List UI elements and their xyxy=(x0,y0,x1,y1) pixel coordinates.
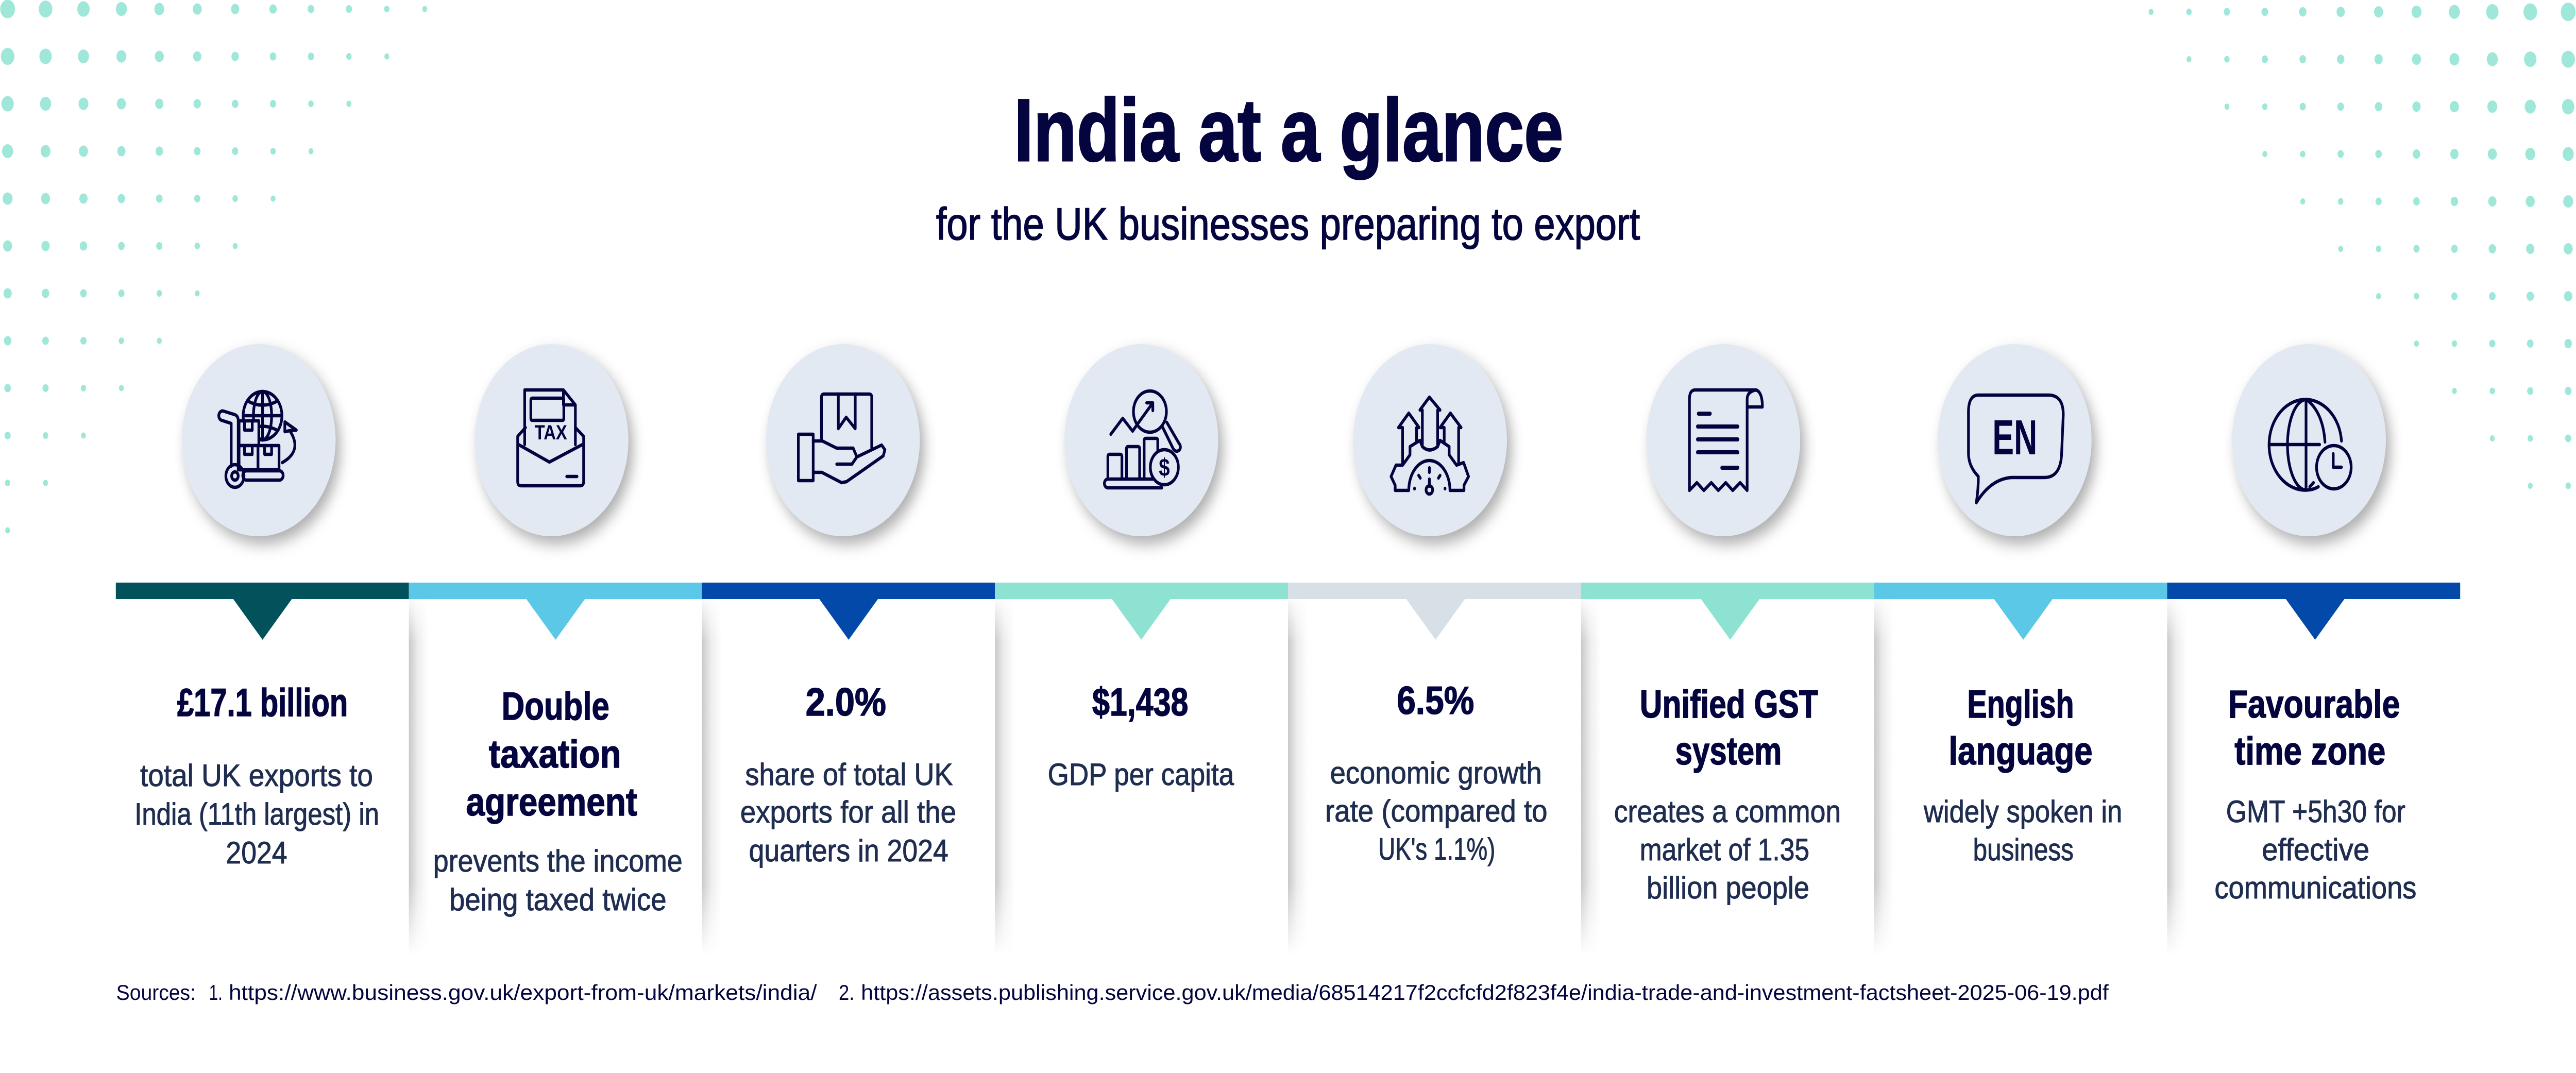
description: exports for all the xyxy=(740,795,956,829)
panel: economic growth xyxy=(1288,344,1581,866)
description: business xyxy=(1973,832,2074,867)
pointer xyxy=(527,599,585,640)
heading: Unified GST xyxy=(1640,683,1818,726)
pointer xyxy=(2286,599,2344,640)
heading: system xyxy=(1675,729,1782,773)
heading: time zone xyxy=(2234,729,2385,773)
description: effective xyxy=(2262,832,2369,867)
colour bar segment xyxy=(2167,583,2460,599)
panel: GDP per capita xyxy=(995,344,1288,792)
panel: unified GST xyxy=(1581,344,1874,905)
stat heading: $1,438 xyxy=(1092,680,1188,724)
description: economic growth xyxy=(1330,756,1542,790)
icon badge: tax envelope xyxy=(474,344,629,536)
pointer xyxy=(1994,599,2053,640)
icon badge: receipt xyxy=(1647,344,1800,536)
icon badge: hand holding box xyxy=(766,344,920,536)
description xyxy=(1923,794,2122,867)
pointer xyxy=(819,599,878,640)
description: GDP per capita xyxy=(1048,757,1234,792)
description: total UK exports to xyxy=(140,758,373,793)
sources line: https://assets.publishing.service.gov.uk/media/68514217f2ccfcfd2f823f4e/india-trade-and-investment-factsheet-2025-06-19.pdf xyxy=(861,981,2109,1005)
title: India at a glance xyxy=(1014,81,1563,180)
panel: time zone xyxy=(2167,344,2460,905)
dot pattern: top left xyxy=(0,0,427,534)
icon badge: EN speech bubble xyxy=(1938,344,2092,536)
icon badge: gear with growth arrows xyxy=(1353,344,1507,536)
icon badge: globe with clock xyxy=(2232,344,2386,536)
description: share of total UK xyxy=(745,757,953,792)
colour bar segment xyxy=(995,583,1288,599)
stat heading: 2.0% xyxy=(806,680,886,724)
description xyxy=(1325,756,1548,866)
stat heading: £17.1 billion xyxy=(177,681,348,725)
icon badge: chart, magnifier and coin: $ xyxy=(1159,454,1170,482)
sources line: 2. xyxy=(839,981,854,1005)
icon badge: chart, magnifier and coin xyxy=(1064,344,1218,536)
pointer xyxy=(1701,599,1759,640)
heading: language xyxy=(1948,729,2093,773)
subtitle: for the UK businesses preparing to export xyxy=(936,198,1640,249)
icon badge: EN speech bubble: EN xyxy=(1992,410,2037,465)
description: 2024 xyxy=(226,836,287,870)
description: billion people xyxy=(1647,871,1809,905)
colour bar segment xyxy=(1874,583,2167,599)
heading: Favourable xyxy=(2228,683,2400,726)
pointer xyxy=(233,599,292,640)
description: India (11th largest) in xyxy=(134,797,379,831)
heading xyxy=(2228,683,2400,773)
colour bar segment xyxy=(1288,583,1581,599)
pointer xyxy=(1112,599,1171,640)
sources line: 1. xyxy=(209,981,223,1005)
sources line xyxy=(116,981,2109,1005)
stat heading: 6.5% xyxy=(1397,679,1474,723)
sources line: https://www.business.gov.uk/export-from-uk/markets/india/ xyxy=(229,981,817,1005)
colour bar segment xyxy=(409,583,702,599)
heading xyxy=(466,685,637,824)
icon badge: trolley with globe xyxy=(182,344,335,536)
heading xyxy=(1948,683,2093,773)
description: market of 1.35 xyxy=(1640,832,1809,867)
heading: Double xyxy=(502,685,609,728)
description: communications xyxy=(2214,871,2416,905)
description xyxy=(1614,794,1841,905)
heading: English xyxy=(1967,683,2074,726)
colour bar segment xyxy=(116,583,409,599)
heading xyxy=(1640,683,1818,773)
description xyxy=(2214,794,2416,905)
heading: agreement xyxy=(466,780,637,824)
panel: export share xyxy=(702,344,995,868)
description: creates a common xyxy=(1614,794,1841,829)
heading: taxation xyxy=(489,733,621,776)
panel: double taxation xyxy=(409,344,702,917)
description: prevents the income xyxy=(433,844,683,878)
description: widely spoken in xyxy=(1923,794,2122,829)
panel: English language xyxy=(1874,344,2167,867)
panel: UK exports xyxy=(116,344,409,870)
description xyxy=(134,758,379,870)
description: UK's 1.1%) xyxy=(1378,832,1495,866)
description xyxy=(740,757,956,868)
colour bar segment xyxy=(1581,583,1874,599)
icon badge: tax envelope: TAX xyxy=(535,421,567,444)
pointer xyxy=(1406,599,1465,640)
sources line: Sources: xyxy=(116,981,196,1005)
dot pattern: top right xyxy=(2148,3,2575,489)
description xyxy=(433,844,683,917)
description: GMT +5h30 for xyxy=(2226,794,2405,829)
colour bar segment xyxy=(702,583,995,599)
description: rate (compared to xyxy=(1325,794,1548,828)
description: being taxed twice xyxy=(449,882,667,917)
description: quarters in 2024 xyxy=(749,833,948,868)
